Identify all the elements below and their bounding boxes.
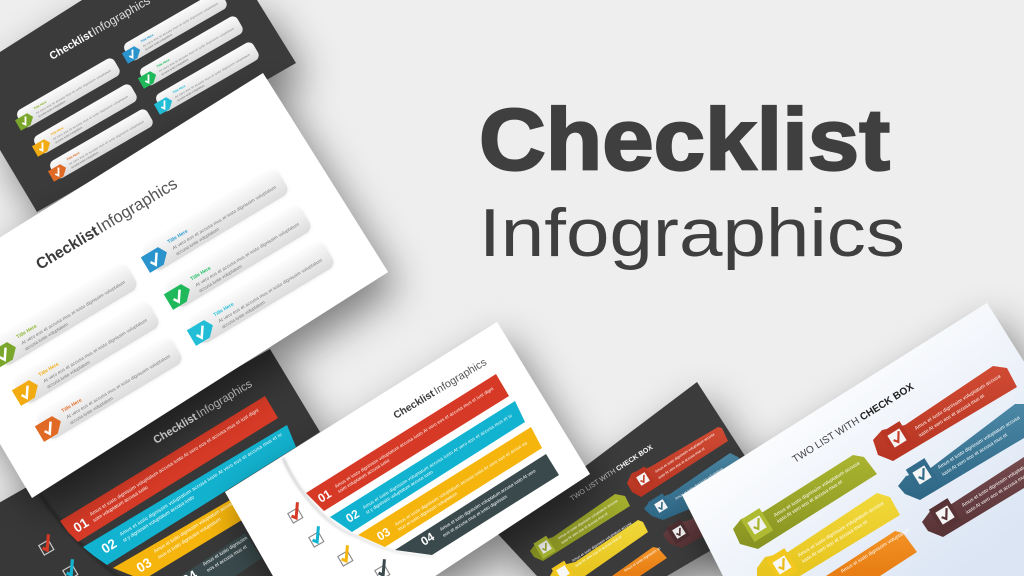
card: yellow: accusa iusto voluptatum bbox=[46, 360, 91, 389]
headline: Infographics: Infographics bbox=[479, 195, 905, 271]
card: orange bbox=[44, 107, 155, 183]
bar 01 bbox=[306, 374, 509, 511]
check: cyan bbox=[306, 526, 326, 547]
slide: dark checklist cards bbox=[0, 0, 296, 212]
bar 04: eos et accusa mus et iusto dignissim bbox=[442, 494, 508, 538]
card: green bbox=[11, 56, 122, 132]
card: green: At vero eos et accusa mus et iusto dignissim voluptatum bbox=[20, 279, 126, 346]
bar 03 bbox=[113, 500, 242, 576]
ribbon: blue bbox=[898, 404, 1024, 500]
bar 04: Amus et iusto dignissim bbox=[202, 535, 249, 568]
card: yellow bbox=[28, 82, 139, 158]
card: cyan: At vero eos et accusa mus et iusto dignissim voluptatum bbox=[217, 257, 323, 324]
ribbon: red: iusto At vero eos et accusa mus et bbox=[918, 393, 986, 439]
card: cyan bbox=[150, 40, 261, 116]
bar 01: ssim voluptatum accusa iusto bbox=[92, 485, 149, 524]
ribbon: yellow: Amus et iusto dignissim voluptatum accusa bbox=[571, 521, 632, 563]
bar 03: mus et iusto dignissim voluptatum bbox=[157, 517, 222, 561]
bar 04: 04 bbox=[418, 529, 437, 549]
bar 01 bbox=[60, 396, 278, 542]
card: orange: accusa iusto voluptatum bbox=[69, 396, 114, 425]
slide: white checklist cards bbox=[0, 73, 388, 498]
card: orange: accusa iusto voluptatum bbox=[70, 150, 100, 169]
slide title: ChecklistInfographics bbox=[32, 174, 181, 273]
ribbon: brown bbox=[663, 495, 750, 548]
card: green: Title Here bbox=[33, 100, 47, 111]
card: green: accusa iusto voluptatum bbox=[37, 99, 67, 118]
bar 04: eos et accusa mus et bbox=[206, 544, 249, 574]
slide title: TWO LIST WITH CHECK BOX bbox=[569, 444, 654, 503]
check: red bbox=[285, 502, 305, 523]
slide title: TWO LIST WITH CHECK BOX bbox=[791, 382, 916, 466]
slide: dark two list with check box bbox=[497, 382, 780, 576]
bar 03: Amus et iusto dignissim voluptatum accusa bbox=[153, 500, 236, 555]
card: yellow: Title Here bbox=[38, 361, 60, 378]
card: bright green bbox=[160, 204, 313, 312]
card: bright green: accusa iusto voluptatum bbox=[198, 264, 243, 293]
ribbon: olive: iusto At vero eos et accusa mus et bbox=[560, 512, 608, 545]
ribbon: orange bbox=[612, 546, 667, 576]
bar 01: Amus et iusto dignissim voluptatum accusa iusto At vero eos et accusa mus et iust digni bbox=[334, 386, 494, 489]
card: green: At vero eos et accusa mus et iusto dignissim voluptatum bbox=[35, 68, 112, 115]
bar 02: Amus et iusto dignissim voluptatum accusa iusto At vero eos et accusa mus et iu bbox=[119, 432, 283, 538]
card: green bbox=[0, 262, 139, 370]
arc shade bbox=[40, 494, 135, 576]
card: blue: Title Here bbox=[167, 228, 189, 245]
card: blue: Title Here bbox=[140, 33, 154, 44]
card: bright green: accusa iusto voluptatum bbox=[160, 57, 190, 76]
ribbon: blue: Amus et iusto dignissim voluptatum bbox=[674, 467, 724, 501]
bar 02: Amus et iusto dignissim voluptatum accusa iusto At vero eos et accusa mus et iu bbox=[362, 413, 513, 510]
ribbon: yellow: Amus et iusto dignissim voluptatum accusa bbox=[797, 500, 885, 559]
bar 03: Amus et iusto dignissim voluptatum accusa iusto At vero eos et arrius ea bbox=[394, 440, 528, 527]
ribbon: red: Amus et iusto dignissim voluptatum accusa bbox=[914, 373, 1002, 432]
bar 01: 01 bbox=[315, 486, 334, 506]
card: yellow: At vero eos et accusa mus et iusto dignissim voluptatum bbox=[42, 317, 148, 384]
ribbon: yellow bbox=[550, 520, 648, 576]
slide: white two list with check box bbox=[682, 303, 1024, 576]
card: blue: accusa iusto voluptatum bbox=[175, 227, 220, 256]
card: orange: At vero eos et accusa mus et iusto dignissim voluptatum bbox=[68, 119, 145, 166]
bar 03: 03 bbox=[374, 524, 393, 544]
ribbon: orange: Amus et iusto dignissim voluptatum bbox=[840, 527, 911, 575]
check: cyan bbox=[60, 559, 80, 576]
headline: Checklist: Checklist bbox=[479, 92, 890, 188]
card: blue: accusa iusto voluptatum bbox=[144, 32, 174, 51]
slide: dark numbered bars bbox=[0, 349, 320, 576]
slide: white numbered bars bbox=[225, 322, 590, 576]
ribbon: yellow bbox=[757, 493, 900, 576]
ribbon: red bbox=[627, 427, 728, 497]
ribbon: yellow: iusto At vero eos et accusa mus et bbox=[801, 519, 869, 565]
ribbon: brown bbox=[922, 453, 1024, 537]
card: cyan bbox=[183, 240, 336, 348]
card: blue bbox=[137, 167, 290, 275]
ribbon: yellow: iusto At vero eos et accusa mus et bbox=[574, 535, 622, 568]
card: bright green: At vero eos et accusa mus et iusto dignissim voluptatum bbox=[194, 221, 300, 288]
card: bright green: Title Here bbox=[156, 58, 170, 69]
card: green: Title Here bbox=[16, 323, 38, 340]
ribbon: olive: iusto At vero eos et accusa mus et bbox=[776, 479, 844, 525]
arc shadow bbox=[283, 458, 435, 556]
card: bright green: At vero eos et accusa mus et iusto dignissim voluptatum bbox=[158, 26, 235, 73]
bar 04 bbox=[395, 454, 559, 555]
ribbon: olive: Amus et iusto dignissim voluptatum accusa bbox=[557, 499, 618, 540]
ribbon: blue bbox=[644, 453, 760, 520]
card: orange: At vero eos et accusa mus et iusto dignissim voluptatum bbox=[65, 353, 171, 420]
card: orange: Title Here bbox=[61, 397, 83, 414]
card: orange: Title Here bbox=[66, 151, 80, 162]
slide title: ChecklistInfographics bbox=[151, 378, 255, 447]
card: cyan: Title Here bbox=[172, 84, 186, 95]
ribbon: blue: Amus et iusto dignissim voluptatum accusa bbox=[937, 415, 1021, 471]
bar 02 bbox=[83, 425, 296, 565]
card: cyan: Title Here bbox=[213, 301, 235, 318]
card: yellow: Title Here bbox=[50, 126, 64, 137]
bar 02: 02 bbox=[343, 506, 362, 526]
bar 01: ssim voluptatum accusa iusto bbox=[337, 458, 391, 494]
ribbon: orange: Amus et iusto dignissim vo bbox=[623, 546, 661, 573]
card: blue: At vero eos et accusa mus et iusto dignissim voluptatum bbox=[171, 184, 277, 251]
bar 01: Amus et iusto dignissim voluptatum accusa iusto At vero eos et accusa mus et iust digni bbox=[89, 408, 260, 518]
bar 04: Amus et iusto dignissim voluptatum accusa iusto At vero bbox=[439, 468, 537, 532]
bar 03 bbox=[358, 427, 542, 547]
card: blue: At vero eos et accusa mus et iusto dignissim voluptatum bbox=[142, 1, 219, 48]
slide title: ChecklistInfographics bbox=[391, 356, 489, 422]
card: orange bbox=[31, 336, 184, 444]
check: yellow bbox=[335, 545, 355, 566]
ribbon: olive bbox=[733, 455, 877, 549]
bar 03: 03 bbox=[134, 555, 155, 576]
card: bright green: Title Here bbox=[190, 265, 212, 282]
bar 04 bbox=[175, 533, 262, 576]
bar 02: 02 bbox=[99, 536, 119, 557]
bar 02: st y dignissim voluptatum accusa iusto bbox=[122, 494, 196, 544]
bar 02 bbox=[330, 401, 525, 532]
card: cyan: accusa iusto voluptatum bbox=[221, 300, 266, 329]
card: yellow bbox=[8, 300, 161, 408]
ribbon: red bbox=[873, 366, 1017, 461]
check: red bbox=[36, 534, 56, 555]
card: cyan: accusa iusto voluptatum bbox=[176, 83, 206, 102]
ribbon: red: Amus et iusto dignissim voluptatum accusa bbox=[654, 432, 715, 474]
check: dark bbox=[372, 559, 392, 576]
ribbon: olive bbox=[530, 494, 630, 561]
card: yellow: At vero eos et accusa mus et iusto dignissim voluptatum bbox=[52, 94, 129, 141]
card: cyan: At vero eos et accusa mus et iusto dignissim voluptatum bbox=[174, 52, 251, 99]
ribbon: blue: iusto At vero eos et accusa mus et bbox=[941, 432, 1009, 478]
bar 01: 01 bbox=[71, 515, 92, 536]
card: yellow: accusa iusto voluptatum bbox=[54, 125, 84, 144]
card: green: accusa iusto voluptatum bbox=[24, 322, 69, 351]
ribbon: olive: Amus et iusto dignissim voluptatum accusa bbox=[773, 460, 861, 519]
ribbon: red: iusto At vero eos et accusa mus et bbox=[657, 447, 705, 480]
bar 03: mus et iusto dignissim voluptatum bbox=[397, 491, 458, 532]
bar 02: st y dignissim voluptatum accusa iusto bbox=[365, 469, 434, 515]
card: bright green bbox=[134, 14, 245, 90]
card: blue bbox=[118, 0, 229, 65]
